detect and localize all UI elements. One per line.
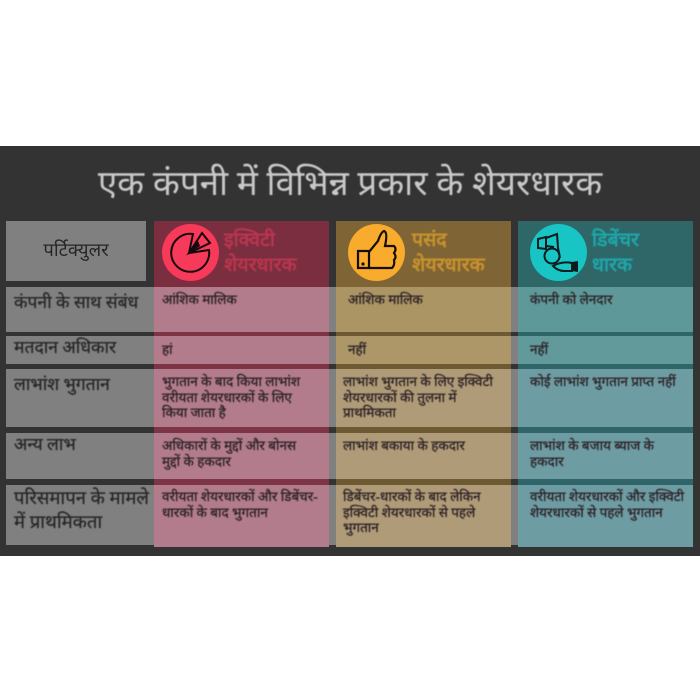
row label: liquidation: परिसमापन के मामले [14,489,149,509]
preference cell: dividend: प्राथमिकता [343,405,396,420]
row label: relationship: कंपनी के साथ संबंध [14,292,138,312]
row label: liquidation [13,486,150,533]
debenture cell: relationship: कंपनी को लेनदार [530,292,612,307]
preference cell: liquidation: इक्विटी शेयरधारकों से पहले [343,504,475,520]
debenture cell: liquidation: वरीयता शेयरधारकों और इक्विटी [530,489,684,504]
equity cell: other benefits: अधिकारों के मुद्दों और बोनस [162,438,296,453]
equity cell: other benefits: मुद्दों के हकदार [162,454,231,468]
icon: pie chart [162,224,219,281]
equity cell: relationship: आंशिक मालिक [162,292,237,307]
equity cell: dividend: किया जाता है [162,405,226,420]
preference cell: liquidation [342,488,482,536]
row label: other benefits: अन्य लाभ [14,434,76,454]
preference cell: dividend [342,373,494,420]
equity cell: voting: हां [162,342,173,357]
header cell: particulars [6,221,146,281]
heading: preference shareholders: शेयरधारक [412,255,485,276]
column: debenture [518,221,693,547]
heading: preference shareholders [411,229,486,276]
heading: equity shareholders [223,228,298,276]
equity cell: liquidation: वरीयता शेयरधारकों और डिबेंचर- [162,489,318,504]
debenture cell: liquidation [529,488,685,522]
preference cell: voting: नहीं [348,342,366,357]
row band: voting [6,336,693,364]
row label: dividend: लाभांश भुगतान [14,374,110,394]
heading: debenture holders: धारक [592,255,632,276]
debenture cell: other benefits: लाभांश के बजाय ब्याज के [530,438,654,453]
debenture cell: liquidation: शेयरधारकों से पहले भुगतान [530,504,663,520]
row band: relationship [6,287,693,332]
column: equity [154,221,329,547]
preference cell: other benefits: लाभांश बकाया के हकदार [343,438,465,453]
header cell: particulars: पर्टिक्युलर [43,241,109,261]
heading: equity shareholders: शेयरधारक [224,255,297,276]
debenture cell: dividend: कोई लाभांश भुगतान प्राप्त नहीं [530,374,676,389]
equity cell: other benefits [161,437,297,470]
equity cell: dividend: भुगतान के बाद किया लाभांश [162,374,300,389]
heading: debenture holders: डिबेंचर [592,230,639,251]
row label: liquidation: में प्राथमिकता [14,513,102,533]
icon: thumbs up [348,224,405,281]
preference cell: liquidation: भुगतान [343,520,379,535]
preference cell: dividend: शेयरधारकों की तुलना में [343,390,457,404]
heading: debenture holders [591,228,640,276]
debenture cell: other benefits: हकदार [530,454,564,468]
row band: other benefits [6,433,693,479]
preference cell: relationship: आंशिक मालिक [348,292,423,307]
row band: liquidation [6,485,693,545]
equity cell: dividend: वरीयता शेयरधारकों के लिए [162,390,292,404]
panel: dark background [0,146,700,556]
row band: dividend [6,369,693,427]
preference cell: dividend: लाभांश भुगतान के लिए इक्विटी [343,374,493,389]
heading: preference shareholders: पसंद [412,230,447,251]
preference cell: liquidation: डिबेंचर-धारकों के बाद लेकिन [343,489,481,504]
heading: equity shareholders: इक्विटी [224,230,275,251]
equity cell: liquidation: धारकों के बाद भुगतान [162,504,268,520]
icon: money in hand [530,224,587,281]
equity cell: liquidation [161,488,318,522]
equity cell: dividend [161,373,301,420]
debenture cell: other benefits [529,437,655,468]
debenture cell: voting: नहीं [530,342,548,357]
title: एक कंपनी में विभिन्न प्रकार के शेयरधारक [98,164,602,203]
column: preference [336,221,511,547]
row label: voting: मतदान अधिकार [14,337,116,357]
